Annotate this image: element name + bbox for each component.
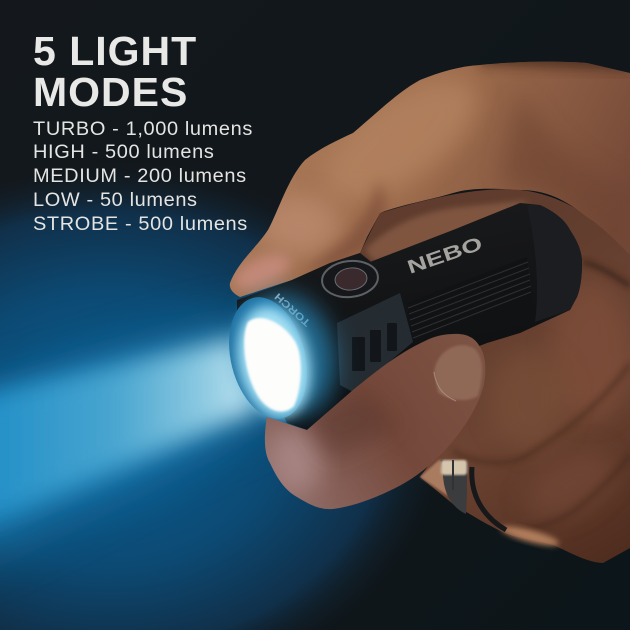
light mode list — [33, 118, 253, 235]
flashlight — [237, 203, 582, 430]
light beam — [0, 325, 270, 560]
light mode list: LOW - 50 lumens — [33, 190, 198, 211]
knurled grip — [407, 257, 532, 345]
torch label: TORCH — [273, 290, 313, 328]
lens — [217, 284, 348, 427]
rear cap — [527, 205, 582, 322]
ring on finger — [441, 460, 506, 530]
light mode list: TURBO - 1,000 lumens — [33, 118, 253, 140]
hand: lower fingers and palm — [360, 189, 630, 563]
logo: NEBO — [405, 233, 485, 279]
light mode list: MEDIUM - 200 lumens — [33, 166, 247, 187]
hand: index finger and back of hand — [230, 62, 630, 297]
title: MODES — [33, 69, 188, 115]
thumb — [264, 334, 486, 510]
light mode list: STROBE - 500 lumens — [33, 214, 248, 235]
head block with vents — [337, 293, 413, 392]
title — [33, 28, 197, 115]
light mode list: HIGH - 500 lumens — [33, 142, 214, 163]
title: 5 LIGHT — [33, 28, 197, 74]
side switch — [320, 258, 380, 300]
